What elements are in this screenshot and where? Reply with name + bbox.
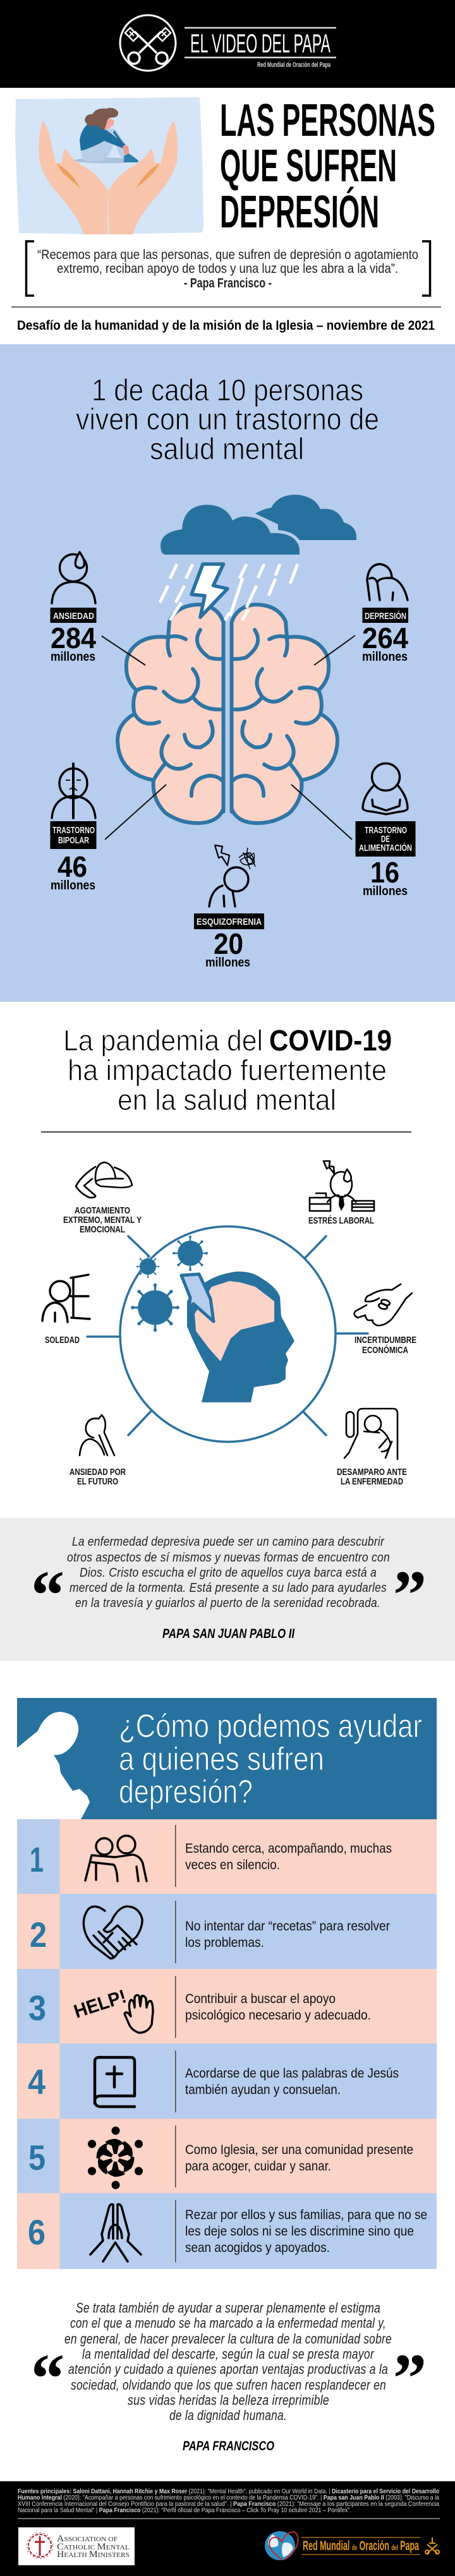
right hand bbox=[109, 121, 178, 234]
step 5: Como Iglesia, ser una comunidad presente bbox=[185, 2143, 413, 2157]
connector lines bbox=[102, 635, 355, 840]
icon: heart handshake bbox=[83, 1906, 142, 1958]
step 4 bbox=[17, 2043, 437, 2119]
shadow bbox=[75, 158, 138, 163]
item: incertidumbre economica: INCERTIDUMBRE bbox=[355, 1335, 416, 1345]
quote text: sus vidas heridas la belleza irreprimible bbox=[128, 2392, 329, 2408]
item: incertidumbre economica bbox=[355, 1284, 416, 1356]
item: agotamiento: EXTREMO, MENTAL Y bbox=[63, 1215, 142, 1225]
quote text: Dios. Cristo escucha el grito de aquellos cuya barca está a bbox=[80, 1566, 377, 1580]
crease left bbox=[57, 164, 80, 188]
stat: ansiedad: millones bbox=[51, 650, 95, 664]
item: estres laboral bbox=[308, 1161, 374, 1226]
panel: how to help bbox=[17, 1698, 437, 2269]
item: agotamiento: AGOTAMIENTO bbox=[75, 1205, 130, 1216]
item: agotamiento bbox=[63, 1162, 142, 1235]
step 6: 6 bbox=[28, 2212, 46, 2252]
prayer quote with brackets bbox=[27, 241, 430, 296]
stat: ansiedad bbox=[51, 552, 96, 664]
quote text: Se trata también de ayudar a superar plenamente el estigma bbox=[76, 2300, 380, 2316]
item: soledad: SOLEDAD bbox=[45, 1335, 80, 1345]
panel: 1 in 10 statistics bbox=[0, 344, 455, 1002]
stat: ansiedad: ANSIEDAD bbox=[53, 611, 94, 622]
icon: praying hands bbox=[90, 2205, 141, 2261]
heading: viven con un trastorno de bbox=[76, 403, 379, 436]
prayer quote with brackets: extremo, reciban apoyo de todos y una luz que les abra a la vida”. bbox=[57, 262, 398, 276]
panel: quote Juan Pablo II bbox=[0, 1518, 455, 1661]
quote text bbox=[67, 1535, 390, 1610]
stat: esquizofrenia bbox=[194, 845, 264, 970]
illustration: hands holding woman bbox=[15, 97, 203, 234]
quote text: La enfermedad depresiva puede ser un camino para descubrir bbox=[72, 1535, 385, 1549]
step 3: psicológico necesario y adecuado. bbox=[185, 2008, 371, 2023]
stat: depresion: millones bbox=[362, 650, 408, 664]
step 3: Contribuir a buscar el apoyo bbox=[185, 1992, 336, 2006]
woman bbox=[80, 108, 138, 162]
sources bbox=[18, 2488, 439, 2514]
main title bbox=[220, 95, 435, 238]
icon: help hand: HELP! bbox=[71, 1986, 129, 2023]
step 1: veces en silencio. bbox=[185, 1858, 280, 1872]
icon: opening quote: “ bbox=[31, 2340, 64, 2417]
keys emblem bbox=[425, 2537, 439, 2554]
item: ansiedad por el futuro bbox=[70, 1415, 126, 1487]
stat: esquizofrenia: 20 bbox=[214, 927, 243, 960]
heading: en la salud mental bbox=[118, 1083, 336, 1116]
item: desamparo ante la enfermedad: DESAMPARO ANTE bbox=[337, 1467, 407, 1478]
item: desamparo ante la enfermedad bbox=[337, 1409, 407, 1487]
item: desamparo ante la enfermedad: LA ENFERMEDAD bbox=[341, 1476, 403, 1487]
header: depresión? bbox=[119, 1774, 253, 1810]
globe and heart bbox=[265, 2531, 298, 2560]
heading: 1 de cada 10 personas bbox=[92, 374, 363, 407]
quote text: la mentalidad del descarte, según la cual se presta mayor bbox=[82, 2346, 375, 2362]
step 3: 3 bbox=[28, 1988, 46, 2028]
footer bbox=[0, 2481, 455, 2576]
icon: closing quote: ” bbox=[393, 2340, 427, 2417]
sources: XVIII Conferencia Internacional del Consejo Pontificio para la pastoral de la salud". | Papa Francisco (2021): "Mensaje a los participantes en la segunda Conferencia bbox=[18, 2500, 439, 2508]
rain bbox=[160, 564, 298, 620]
logo: catholic mental health ministers bbox=[18, 2527, 135, 2565]
head silhouette bbox=[181, 1272, 294, 1402]
stat: esquizofrenia: millones bbox=[205, 956, 250, 970]
item: ansiedad por el futuro: EL FUTURO bbox=[77, 1476, 118, 1487]
stat: trastorno de alimentacion: 16 bbox=[370, 856, 399, 889]
quote text: en la travesía y guiarlos al puerto de la serenidad recobrada. bbox=[75, 1596, 380, 1610]
step 2: los problemas. bbox=[185, 1935, 264, 1950]
stat: trastorno de alimentacion: TRASTORNO bbox=[365, 825, 407, 836]
logo: red mundial de oracion: Red Mundial de Oración del Papa bbox=[303, 2539, 419, 2553]
step 6 bbox=[17, 2193, 437, 2269]
praying silhouette bbox=[17, 1712, 90, 1819]
quote text: otros aspectos de sí mismos y nuevas formas de encuentro con bbox=[67, 1551, 390, 1565]
item: incertidumbre economica: ECONÓMICA bbox=[362, 1344, 408, 1356]
icon: bible bbox=[95, 2057, 135, 2107]
step 4: 4 bbox=[28, 2062, 46, 2102]
panel: quote Papa Francisco bbox=[31, 2300, 427, 2453]
step 1 bbox=[17, 1819, 437, 1894]
stat: trastorno de alimentacion: millones bbox=[363, 884, 408, 898]
brain bbox=[118, 605, 337, 823]
viruses bbox=[131, 1236, 208, 1332]
step 2: 2 bbox=[30, 1915, 47, 1954]
stat: trastorno bipolar: 46 bbox=[58, 850, 87, 883]
logo wordmark: EL VIDEO DEL PAPA bbox=[190, 28, 331, 58]
prayer quote with brackets: - Papa Francisco - bbox=[184, 276, 272, 291]
stat: esquizofrenia: ESQUIZOFRENIA bbox=[197, 917, 262, 927]
quote text: de la dignidad humana. bbox=[169, 2407, 287, 2423]
item: soledad bbox=[42, 1275, 90, 1345]
icon: opening quote: “ bbox=[31, 1556, 64, 1634]
left hand bbox=[39, 121, 108, 234]
stat: trastorno bipolar: BIPOLAR bbox=[58, 835, 89, 846]
step 6: Rezar por ellos y sus familias, para que no se bbox=[185, 2208, 427, 2222]
logo: crossed keys bbox=[120, 15, 176, 71]
step 4: Acordarse de que las palabras de Jesús bbox=[185, 2066, 399, 2081]
heading bbox=[76, 374, 379, 466]
stat: trastorno bipolar: millones bbox=[51, 879, 95, 893]
icon: two people bbox=[85, 1836, 147, 1881]
step 5: 5 bbox=[28, 2138, 46, 2177]
stat: trastorno de alimentacion: DE bbox=[381, 834, 390, 845]
stat: ansiedad: 284 bbox=[51, 622, 96, 654]
stat: trastorno de alimentacion bbox=[355, 763, 416, 898]
panel: covid impact bbox=[41, 1024, 416, 1487]
sources: Humano Integral (2020): "Acompañar a personas con sufrimiento psicológico en el contexto de la Pandemia COVID-19". | Papa san Juan Pablo II (2003): "Discurso a la bbox=[18, 2494, 439, 2501]
step 2: No intentar dar “recetas” para resolver bbox=[185, 1919, 390, 1934]
logo lines bbox=[185, 28, 336, 57]
header band bbox=[0, 0, 455, 88]
quote text: merced de la tormenta. Está presente a su lado para ayudarles bbox=[70, 1581, 387, 1595]
stat: trastorno de alimentacion: ALIMENTACIÓN bbox=[359, 842, 412, 853]
step 6: les deje solos ni se les discrimine sino que bbox=[185, 2224, 414, 2239]
icon: lightning bolt bbox=[191, 564, 228, 617]
step 1: 1 bbox=[30, 1839, 44, 1879]
step 1: Estando cerca, acompañando, muchas bbox=[185, 1841, 392, 1856]
item: ansiedad por el futuro: ANSIEDAD POR bbox=[70, 1467, 126, 1478]
heading: salud mental bbox=[150, 433, 304, 466]
header: a quienes sufren bbox=[119, 1741, 324, 1778]
icon: community circle bbox=[88, 2126, 143, 2189]
logo: catholic mental health ministers: HEALTH MINISTERS bbox=[57, 2549, 130, 2560]
heading bbox=[63, 1024, 392, 1116]
quote text bbox=[64, 2300, 392, 2423]
icon: help hand bbox=[71, 1986, 153, 2033]
quote author: PAPA FRANCISCO bbox=[183, 2439, 274, 2453]
top divider bbox=[11, 306, 441, 308]
logo subtitle: Red Mundial de Oración del Papa bbox=[257, 61, 331, 69]
stat: trastorno bipolar bbox=[51, 764, 96, 893]
stat: trastorno bipolar: TRASTORNO bbox=[52, 825, 95, 836]
icon: closing quote: ” bbox=[393, 1556, 427, 1634]
heading: ha impactado fuertemente bbox=[68, 1054, 387, 1086]
step 4: también ayudan y consuelan. bbox=[185, 2083, 341, 2097]
logo: red mundial de oracion bbox=[265, 2531, 439, 2560]
step 5: para acoger, cuidar y sanar. bbox=[185, 2159, 331, 2174]
stat: depresion bbox=[362, 564, 408, 664]
crown and cross bbox=[27, 2533, 53, 2558]
item: agotamiento: EMOCIONAL bbox=[80, 1224, 125, 1235]
step 5 bbox=[17, 2119, 437, 2193]
stat: depresion: 264 bbox=[362, 622, 408, 654]
icon: storm clouds bbox=[161, 495, 356, 555]
item: estres laboral: ESTRÉS LABORAL bbox=[308, 1215, 374, 1226]
step 6: sean acogidos y apoyados. bbox=[185, 2241, 330, 2255]
header bbox=[17, 1698, 437, 1819]
step 3 bbox=[17, 1969, 437, 2043]
quote author: PAPA SAN JUAN PABLO II bbox=[162, 1627, 295, 1641]
logo: catholic mental health ministers: CATHOLIC MENTAL bbox=[57, 2542, 130, 2552]
stat: depresion: DEPRESIÓN bbox=[365, 610, 406, 622]
step 2 bbox=[17, 1894, 437, 1969]
logo: catholic mental health ministers: ASSOCIATION OF bbox=[57, 2534, 118, 2544]
sources: Fuentes principales: Saloni Dattani, Hannah Ritchie y Max Roser (2021): "Mental Health", publicado en Our World in Data. | Dicasterio para el Servicio del Desarrollo bbox=[18, 2488, 439, 2495]
circle and spokes bbox=[87, 1227, 368, 1441]
heading: COVID-19 bbox=[269, 1024, 392, 1057]
heading: La pandemia del bbox=[63, 1024, 263, 1057]
sources: Nacional para la Salud Mental" | Papa Francisco (2021): "Perfil oficial de Papa Francisco – Click To Pray 10 octubre 2021 – Pontifex". bbox=[18, 2507, 351, 2514]
